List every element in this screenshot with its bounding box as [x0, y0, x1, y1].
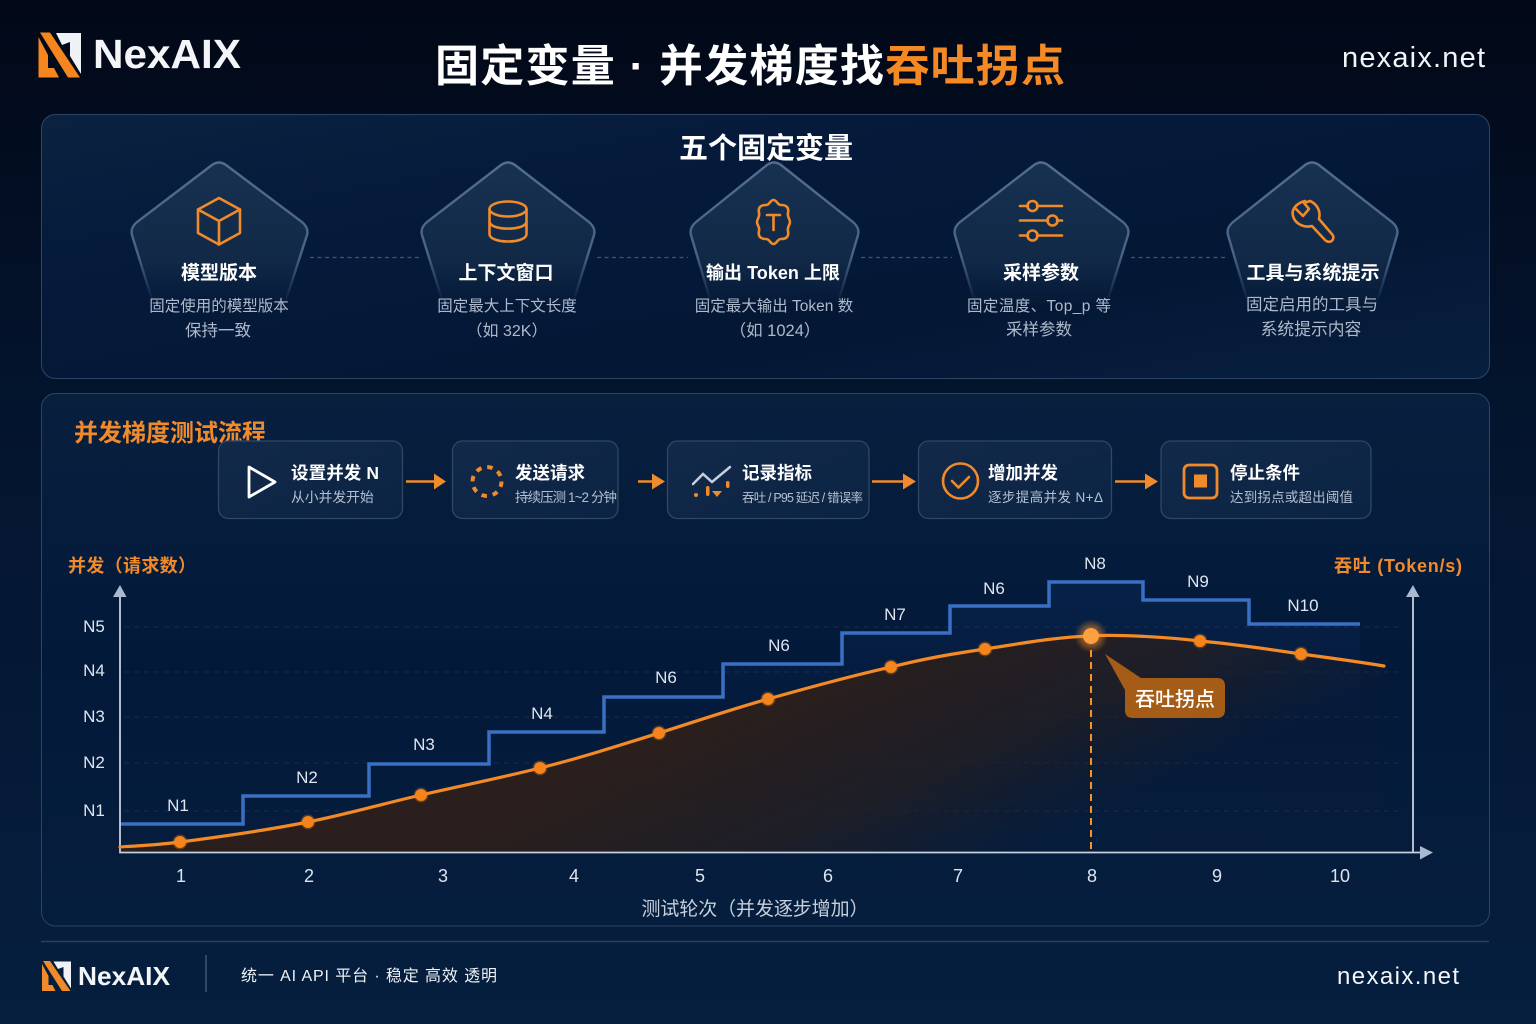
- card: model version: 模型版本: [181, 262, 257, 284]
- icon: token: [757, 200, 790, 244]
- step labels: N2: [296, 768, 318, 787]
- callout: throughput knee: 吞吐拐点: [1135, 688, 1215, 711]
- y axis title: concurrency: 并发（请求数）: [68, 555, 196, 576]
- card: output token limit: 固定最大输出 Token 数: [695, 297, 854, 315]
- x axis title: 测试轮次（并发逐步增加）: [642, 898, 868, 920]
- step: send requests: 持续压测 1~2 分钟: [515, 489, 617, 505]
- x axis labels: 8: [1087, 866, 1097, 886]
- step: stop condition: 达到拐点或超出阈值: [1230, 490, 1353, 505]
- throughput curve: [120, 635, 1384, 847]
- step labels: N6: [655, 668, 677, 687]
- axes: [120, 595, 1422, 852]
- heading: test flow: 并发梯度测试流程: [74, 420, 266, 447]
- card: sampling parameters: 固定温度、Top_p 等: [967, 297, 1111, 315]
- throughput area: [120, 635, 1387, 852]
- step labels: N7: [884, 605, 906, 624]
- y axis labels: N3: [83, 707, 105, 726]
- icon: check circle: [943, 464, 978, 498]
- card: tools and system prompt: [1228, 162, 1397, 339]
- blue glow under steps: [120, 582, 1360, 852]
- card: context window: 固定最大上下文长度: [437, 297, 577, 315]
- arrow: step 1 to 2: [406, 474, 446, 490]
- step labels: N6: [768, 636, 790, 655]
- panel: concurrency gradient test flow: [42, 394, 1490, 926]
- x axis labels: 9: [1212, 866, 1222, 886]
- knee guide line: [1090, 650, 1092, 850]
- logo: NexAIX footer: NexAIX: [78, 961, 171, 991]
- x axis labels: 10: [1330, 866, 1350, 886]
- card: sampling parameters: 采样参数: [1006, 320, 1072, 339]
- card: output token limit: 输出 Token 上限: [706, 262, 840, 283]
- footer url: nexaix.net: [1337, 963, 1459, 990]
- step labels: N8: [1084, 554, 1106, 573]
- heading: five fixed variables: 五个固定变量: [679, 132, 853, 165]
- card: sampling parameters: [955, 162, 1128, 339]
- step labels: N1: [167, 796, 189, 815]
- card: tools and system prompt: 系统提示内容: [1261, 320, 1362, 339]
- y axis labels: N2: [83, 753, 105, 772]
- card: tools and system prompt: 固定启用的工具与: [1246, 295, 1378, 314]
- card: output token limit: [691, 162, 858, 340]
- x axis labels: 3: [438, 866, 448, 886]
- step: send requests: 发送请求: [515, 463, 585, 483]
- step labels: N9: [1187, 572, 1209, 591]
- x axis labels: 6: [823, 866, 833, 886]
- icon: play: [249, 467, 275, 497]
- step labels: N3: [413, 735, 435, 754]
- connectors: [310, 256, 1225, 258]
- x axis labels: 2: [304, 866, 314, 886]
- knee point: [1074, 619, 1108, 653]
- step labels: N10: [1287, 596, 1319, 615]
- icon: wrench: [1293, 201, 1333, 242]
- step: record metrics: 记录指标: [742, 463, 812, 483]
- y axis labels: N5: [83, 617, 105, 636]
- panel: five fixed variables: [42, 114, 1490, 378]
- card: tools and system prompt: 工具与系统提示: [1246, 261, 1380, 284]
- card: context window: 上下文窗口: [458, 261, 554, 284]
- header url: nexaix.net: [1342, 42, 1485, 74]
- x axis labels: 1: [176, 866, 186, 886]
- logo: NexAIX header: NexAIX: [93, 31, 241, 77]
- y axis title: throughput: 吞吐 (Token/s): [1334, 556, 1462, 576]
- y axis labels: [83, 617, 105, 820]
- icon: sliders: [1020, 201, 1062, 240]
- step: increase concurrency: 逐步提高并发 N+Δ: [988, 489, 1103, 505]
- arrow: step 3 to 4: [872, 474, 916, 490]
- step: increase concurrency: 增加并发: [988, 463, 1058, 483]
- step: set concurrency: 设置并发 N: [291, 463, 379, 483]
- y axis labels: N1: [83, 801, 105, 820]
- step labels: N6: [983, 579, 1005, 598]
- y axis labels: N4: [83, 661, 105, 680]
- footer tagline: 统一 AI API 平台 · 稳定 高效 透明: [241, 967, 497, 985]
- card: sampling parameters: 采样参数: [1003, 261, 1079, 284]
- step: set concurrency: 从小并发开始: [291, 490, 374, 505]
- step: send requests: [452, 441, 618, 518]
- icon: cube: [198, 198, 240, 244]
- icon: database: [490, 202, 526, 242]
- data points: [174, 635, 1307, 848]
- x axis labels: 7: [953, 866, 963, 886]
- icon: metric chart: [693, 467, 730, 497]
- axis arrows: [113, 585, 1433, 860]
- footer: [41, 942, 1489, 992]
- chart: concurrency and throughput: [68, 554, 1462, 920]
- step labels: N4: [531, 704, 553, 723]
- card: model version: 保持一致: [185, 321, 251, 340]
- step: record metrics: 吞吐 / P95 延迟 / 错误率: [742, 490, 863, 505]
- arrow: step 4 to 5: [1115, 474, 1158, 490]
- icon: dashed circle: [472, 467, 502, 496]
- card: context window: [422, 162, 594, 340]
- card: context window: （如 32K）: [467, 322, 547, 340]
- callout: throughput knee: [1105, 654, 1225, 718]
- step: stop condition: 停止条件: [1230, 463, 1300, 483]
- step: increase concurrency: [918, 441, 1112, 518]
- card: output token limit: （如 1024）: [730, 321, 820, 340]
- grid lines: [124, 627, 1405, 811]
- arrow: step 2 to 3: [638, 474, 665, 490]
- x axis labels: 5: [695, 866, 705, 886]
- card: model version: 固定使用的模型版本: [149, 297, 289, 315]
- card: model version: [132, 162, 307, 340]
- x axis labels: [176, 866, 1350, 886]
- icon: stop square: [1184, 465, 1217, 498]
- x axis labels: 4: [569, 866, 579, 886]
- title: 固定变量 · 并发梯度找吞吐拐点: [435, 42, 1065, 91]
- step: stop condition: [1161, 441, 1371, 518]
- step: record metrics: [668, 441, 869, 518]
- step: set concurrency: [218, 441, 402, 518]
- step labels: [167, 554, 1319, 815]
- concurrency step line: [120, 582, 1360, 824]
